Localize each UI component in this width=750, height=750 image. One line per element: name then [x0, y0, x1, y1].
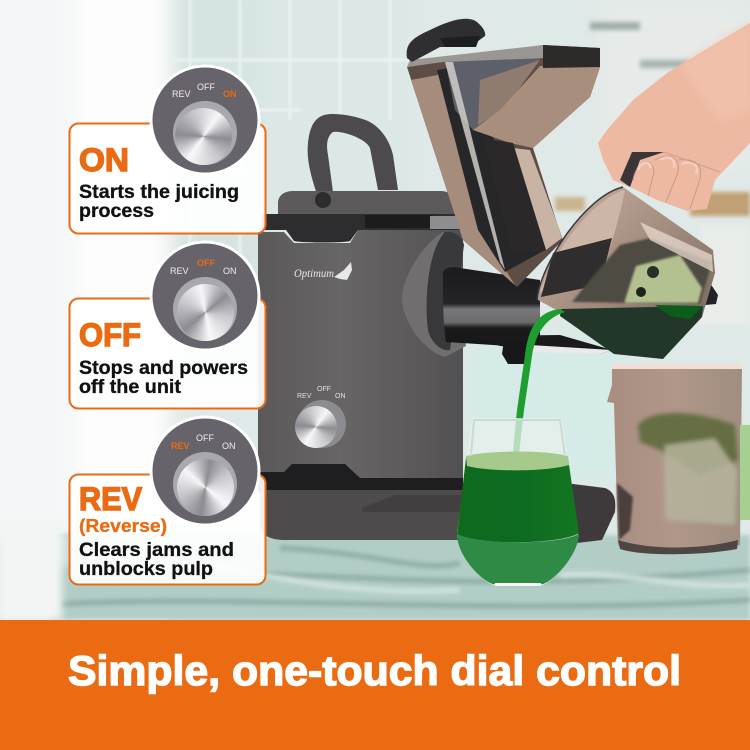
chute silhouette [407, 45, 600, 287]
dial: REV: REV [171, 441, 190, 451]
dial: ON: ON [223, 89, 236, 99]
marble countertop [0, 520, 750, 620]
text: REV description: Clears jams and [79, 540, 234, 561]
dial: REV: ON [222, 441, 236, 451]
juice glass [457, 418, 579, 586]
text: ON description: Starts the juicing [79, 182, 239, 203]
logo: Optimum [294, 266, 334, 280]
pulp container [607, 364, 750, 554]
text: REV description: unblocks pulp [79, 559, 213, 580]
main casing [258, 230, 463, 482]
handle [308, 114, 398, 197]
green juice jug [512, 187, 715, 462]
juicer: motor body: OFF [317, 386, 331, 393]
dial: ON [151, 66, 259, 174]
panel: REV [70, 474, 266, 584]
dial: ON: OFF [197, 82, 215, 92]
juicer: auger housing and chute [402, 232, 718, 364]
dial: OFF [151, 242, 259, 350]
dark central strip [437, 66, 545, 272]
rim [407, 45, 546, 67]
dial: OFF: ON [223, 266, 236, 276]
juicer: motor body: ON [335, 393, 346, 400]
heading: OFF: OFF [79, 317, 141, 353]
hand holding jug [598, 23, 750, 211]
heading: REV: REV [79, 481, 143, 517]
subheading: Reverse: (Reverse) [79, 516, 167, 536]
dark band [262, 214, 462, 242]
lit funnel [473, 66, 600, 148]
hopper with cap [407, 19, 600, 287]
dial: REV: OFF [196, 433, 214, 443]
text: ON description: process [79, 201, 154, 222]
dial: OFF: REV [170, 266, 189, 276]
lid [278, 191, 455, 216]
dial: REV [151, 417, 259, 525]
mini dial: REV [297, 393, 312, 400]
dial: OFF: OFF [197, 258, 215, 268]
panel: OFF [70, 298, 266, 408]
dial: ON: REV [172, 89, 191, 99]
cap [407, 19, 485, 62]
juicer: motor body [258, 114, 615, 543]
title: Simple, one-touch dial control [68, 647, 681, 694]
panel: ON [70, 124, 266, 234]
text: OFF description: off the unit [79, 377, 182, 398]
heading: ON: ON [79, 142, 129, 178]
footer band [0, 620, 750, 750]
base band and foot [258, 464, 463, 492]
left brown strip [411, 74, 515, 285]
light vertical strip [513, 148, 562, 250]
text: OFF description: Stops and powers [79, 358, 248, 379]
window [445, 58, 540, 130]
pour stream [512, 309, 565, 462]
right foot extension [463, 484, 615, 543]
